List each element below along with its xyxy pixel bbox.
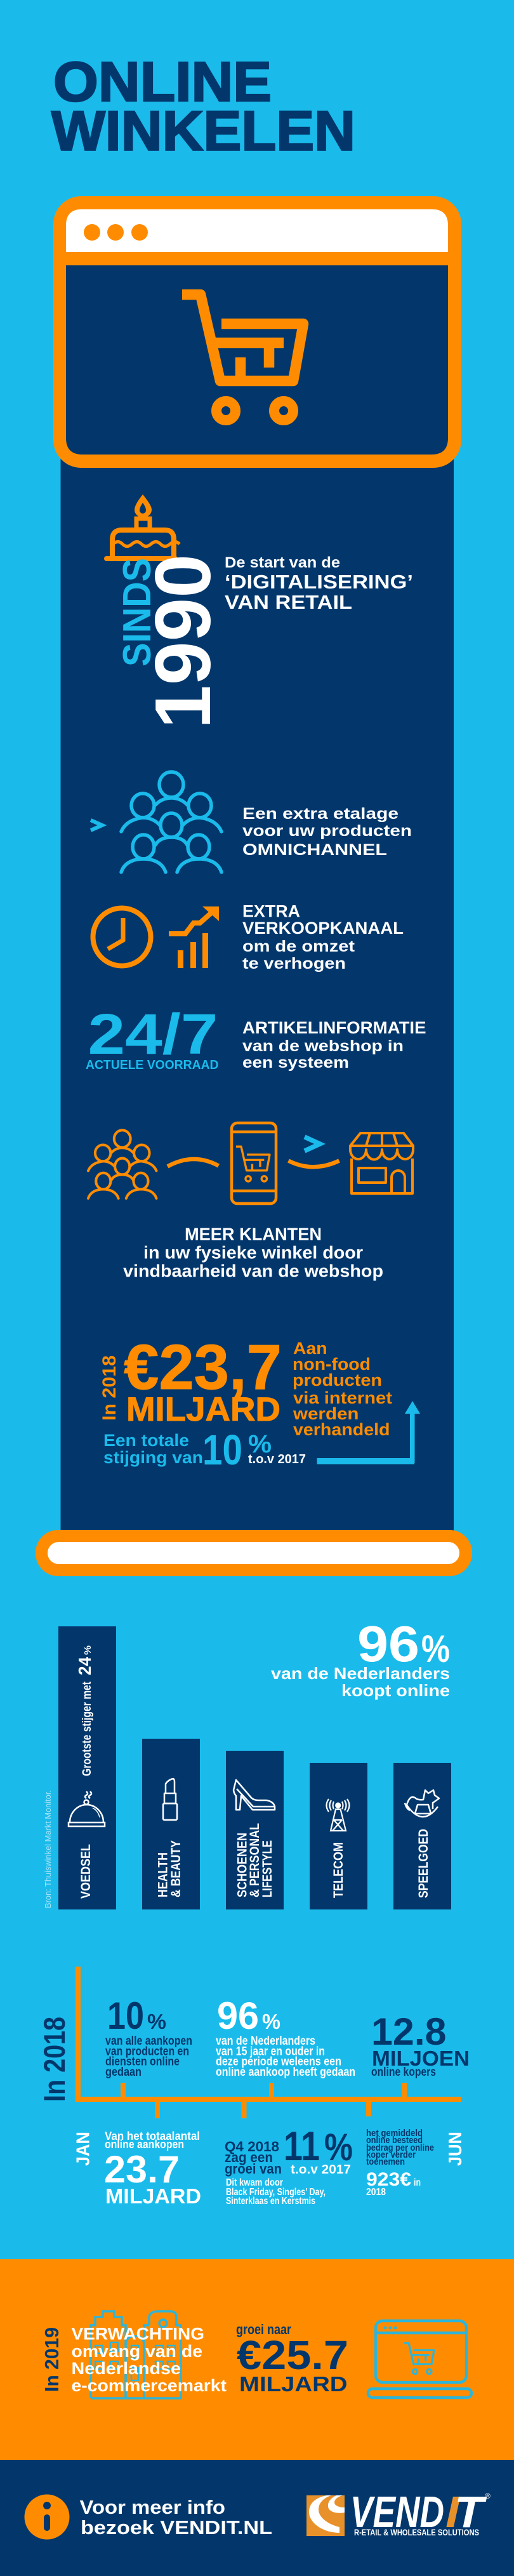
stat: stijging 10%: 10 [202, 1426, 242, 1474]
logo: vendit: I [445, 2487, 461, 2537]
text: digitalisering: VAN RETAIL [225, 591, 352, 613]
label: jun: JUN [445, 2132, 466, 2166]
heading: 1990: 1990 [140, 554, 227, 729]
stat: 96% van de nederlanders [271, 1616, 450, 1700]
icon: clock [93, 908, 151, 966]
text: extra verkoopkanaal: VERKOOPKANAAL [242, 919, 404, 938]
stat: 23,7 miljard [99, 1332, 282, 1428]
stat: 923 euro: in [414, 2177, 421, 2188]
logo: vendit: VEND [350, 2487, 444, 2537]
arrow: curve to phone [168, 1159, 218, 1167]
stat: q4 11%: % [324, 2126, 353, 2168]
stat: 12.8 miljoen: MILJOEN [372, 2047, 470, 2070]
icon: people blue [121, 772, 221, 872]
panel: verwachting 2019 [0, 2259, 514, 2460]
icon: dutch houses [91, 2311, 181, 2398]
text: extra verkoopkanaal: EXTRA [242, 901, 300, 920]
text: verwachting [71, 2325, 227, 2395]
icon: high heel [234, 1780, 275, 1810]
stat: 10% aankopen: 10 [107, 1995, 144, 2037]
text: grootste stijger: 24 [75, 1657, 95, 1675]
logo: vendit [306, 2487, 491, 2537]
bar: speelgoed [393, 1763, 451, 1909]
stat: stijging 10% [103, 1426, 306, 1474]
text: digitalisering: De start van de [225, 554, 340, 571]
icon: people orange [88, 1130, 156, 1198]
text: extra etalage [242, 805, 412, 859]
text: grootste stijger: Grootste stijger met [81, 1681, 94, 1776]
logo: vendit: ® [485, 2492, 491, 2500]
stat: 923 euro [366, 2128, 434, 2198]
stat: 96% nederlanders: online aankoop heeft gedaan [216, 2066, 355, 2079]
text: verwachting: omvang van de [71, 2342, 202, 2361]
browser window with cart [53, 196, 461, 468]
stat: q4 11% [225, 2123, 353, 2207]
icon: laptop with cart [368, 2321, 471, 2398]
text: non-food: werden [293, 1404, 359, 1423]
stat: 923 euro: online besteed [366, 2135, 423, 2146]
stat: 23.7 miljard: online aankopen [105, 2138, 184, 2151]
logo: vendit: T [454, 2487, 487, 2537]
stat: 923 euro: 923€ [366, 2169, 411, 2190]
arrow: chevron blue [91, 820, 102, 830]
icon: cloche [69, 1791, 105, 1826]
stat: q4 11%: 11 [284, 2123, 320, 2169]
text: extra verkoopkanaal: te verhogen [242, 955, 346, 973]
text: meer info [80, 2496, 272, 2539]
text: non-food [293, 1339, 392, 1439]
stat: 23.7 miljard: MILJARD [105, 2184, 201, 2208]
text: artikelinformatie: van de webshop in [242, 1037, 404, 1055]
panel: footer [0, 2460, 514, 2576]
stat: q4 11%: Q4 2018 [225, 2139, 279, 2154]
text: meer info: Voor meer info [80, 2496, 225, 2518]
title: WINKELEN [51, 99, 355, 163]
icon: shopping cart [182, 295, 303, 420]
heading: sinds: SINDS [115, 558, 159, 667]
bar: speelgoed: SPEELGOED [416, 1829, 431, 1898]
text: grootste stijger: % [82, 1645, 93, 1655]
icon: rocking horse [405, 1790, 439, 1817]
timeline axes [78, 1967, 461, 2118]
bar: health and beauty [142, 1739, 200, 1909]
title [51, 50, 355, 163]
text: meer klanten: in uw fysieke winkel door [143, 1243, 363, 1262]
stat: 923 euro: bedrag per online [366, 2142, 434, 2153]
stat: 96% nederlanders: 96 [217, 1995, 259, 2037]
bar: health and beauty: HEALTH [156, 1852, 170, 1897]
stat: stijging 10%: Een totale [103, 1431, 189, 1450]
stat: stijging 10%: % [248, 1430, 272, 1458]
icon: small cart [404, 2343, 434, 2374]
text: non-food: non-food [293, 1355, 371, 1374]
browser dots [84, 224, 148, 241]
icon: mini cart [236, 1146, 270, 1181]
arrow: growth [317, 1401, 420, 1464]
stat: 25.7 miljard [236, 2321, 348, 2396]
stat: 96% van de nederlanders: koopt online [341, 1681, 450, 1700]
icon: growth chart [169, 906, 219, 968]
navy main panel [61, 444, 454, 1536]
text: digitalisering [225, 554, 413, 613]
stat: 96% nederlanders: van 15 jaar en ouder in [216, 2045, 325, 2058]
stat: 23.7 miljard: Van het totaalantal [105, 2130, 200, 2142]
text: extra etalage: OMNICHANNEL [242, 841, 387, 859]
text: non-food: verhandeld [293, 1420, 390, 1439]
stat: 10% aankopen: van producten en [105, 2045, 189, 2058]
stat: 10% aankopen: % [147, 2010, 166, 2033]
stat: 23.7 miljard [104, 2130, 201, 2208]
logo: vendit: R-ETAIL & WHOLESALE SOLUTIONS [354, 2527, 479, 2537]
icon: birthday cake [104, 495, 180, 561]
text: non-food: via internet [293, 1388, 392, 1407]
stat: stijging 10%: stijging van [103, 1448, 203, 1467]
stat: 10% aankopen: gedaan [105, 2066, 142, 2079]
text: meer klanten: MEER KLANTEN [185, 1224, 322, 1244]
arrow: chevron [305, 1137, 320, 1151]
icon: antenna tower [326, 1799, 349, 1831]
stat: 923 euro: toenemen [366, 2156, 405, 2167]
bar: schoenen: LIFESTYLE [260, 1840, 275, 1897]
browser bottom bar [36, 1530, 472, 1576]
bar: voedsel [58, 1626, 116, 1909]
icon: phone with cart [232, 1123, 276, 1204]
stat: q4 11%: Black Friday, Singles’ Day, [226, 2187, 326, 2198]
text: extra etalage: Een extra etalage [242, 805, 399, 823]
stat: 12.8 miljoen [371, 2010, 470, 2079]
source note: Bron: Thuiswinkel Markt Monitor. [44, 1790, 53, 1908]
stat: stijging 10%: t.o.v 2017 [248, 1452, 306, 1466]
stat: 10% aankopen [105, 1995, 192, 2079]
stat: 96% van de nederlanders: % [421, 1628, 450, 1670]
icon: shop [350, 1133, 413, 1193]
bar: schoenen: & PERSONAL [247, 1823, 262, 1897]
stat: 10% aankopen: diensten online [105, 2055, 180, 2068]
label: jan: JAN [74, 2132, 94, 2166]
stat: 23,7 miljard: In 2018 [99, 1355, 120, 1421]
title: ONLINE [53, 50, 272, 113]
text: artikelinformatie: een systeem [242, 1054, 349, 1072]
bar: voedsel: VOEDSEL [79, 1844, 93, 1899]
stat: 10% aankopen: van alle aankopen [105, 2035, 192, 2048]
stat: 25.7 miljard: groei naar [236, 2321, 291, 2337]
stat: 23,7 miljard: MILJARD [126, 1391, 280, 1428]
stat: 25.7 miljard: MILJARD [239, 2372, 348, 2396]
arrow: curve to shop [288, 1160, 339, 1167]
stat: 923 euro: koper verder [366, 2149, 416, 2160]
text: verwachting: e-commercemarkt [71, 2376, 227, 2395]
text: extra etalage: voor uw producten [242, 822, 412, 840]
stat: q4 11%: t.o.v 2017 [291, 2163, 351, 2177]
label: in 2018: In 2018 [37, 2017, 71, 2102]
text: extra verkoopkanaal [242, 901, 404, 973]
stat: 96% nederlanders: van de Nederlanders [216, 2035, 315, 2048]
stat: 96% van de nederlanders: van de Nederlanders [271, 1664, 450, 1683]
bar: schoenen: SCHOENEN [235, 1833, 249, 1897]
text: meer klanten: vindbaarheid van de webshop [123, 1261, 383, 1281]
stat: 96% nederlanders: % [262, 2010, 280, 2033]
stat: q4 11%: groei van [225, 2161, 282, 2177]
stat: 23,7 miljard: €23,7 [124, 1332, 282, 1403]
stat: 23.7 miljard: 23.7 [104, 2148, 180, 2191]
stat: 96% nederlanders [216, 1995, 355, 2079]
text: grootste stijger [75, 1645, 95, 1776]
text: verwachting: VERWACHTING [71, 2325, 204, 2344]
stat: q4 11%: Sinterklaas en Kerstmis [226, 2196, 315, 2207]
stat: 24/7: ACTUELE VOORRAAD [86, 1058, 218, 1072]
label: in 2019: In 2019 [41, 2327, 63, 2392]
icon: info [24, 2495, 70, 2539]
stat: 96% van de nederlanders: 96 [357, 1616, 419, 1672]
text: meer info: bezoek VENDIT.NL [81, 2516, 272, 2539]
text: meer klanten [123, 1224, 383, 1281]
stat: q4 11%: zag een [225, 2149, 273, 2165]
text: artikelinformatie [242, 1018, 426, 1072]
bar: schoenen [226, 1751, 284, 1909]
bar: telecom: TELECOM [331, 1842, 346, 1898]
bar: telecom [310, 1763, 367, 1909]
text: artikelinformatie: ARTIKELINFORMATIE [242, 1018, 426, 1037]
stat: 12.8 miljoen: 12.8 [371, 2010, 447, 2053]
text: extra verkoopkanaal: om de omzet [242, 938, 355, 955]
stat: 24/7: 24/7 [88, 1003, 218, 1066]
text: verwachting: Nederlandse [71, 2359, 181, 2378]
stat: 12.8 miljoen: online kopers [371, 2066, 436, 2079]
text: non-food: Aan [293, 1339, 327, 1358]
stat: 96% nederlanders: deze periode weleens een [216, 2055, 341, 2068]
icon: lipstick [163, 1779, 177, 1820]
text: non-food: producten [293, 1371, 382, 1390]
stat: 923 euro: het gemiddeld [366, 2128, 423, 2139]
stat: q4 11%: Dit kwam door [226, 2177, 283, 2188]
bar: health and beauty: & BEAUTY [169, 1840, 183, 1897]
stat: 25.7 miljard: €25.7 [237, 2332, 348, 2378]
stat: 923 euro: 2018 [366, 2187, 386, 2198]
text: digitalisering: ‘DIGITALISERING’ [225, 571, 413, 593]
